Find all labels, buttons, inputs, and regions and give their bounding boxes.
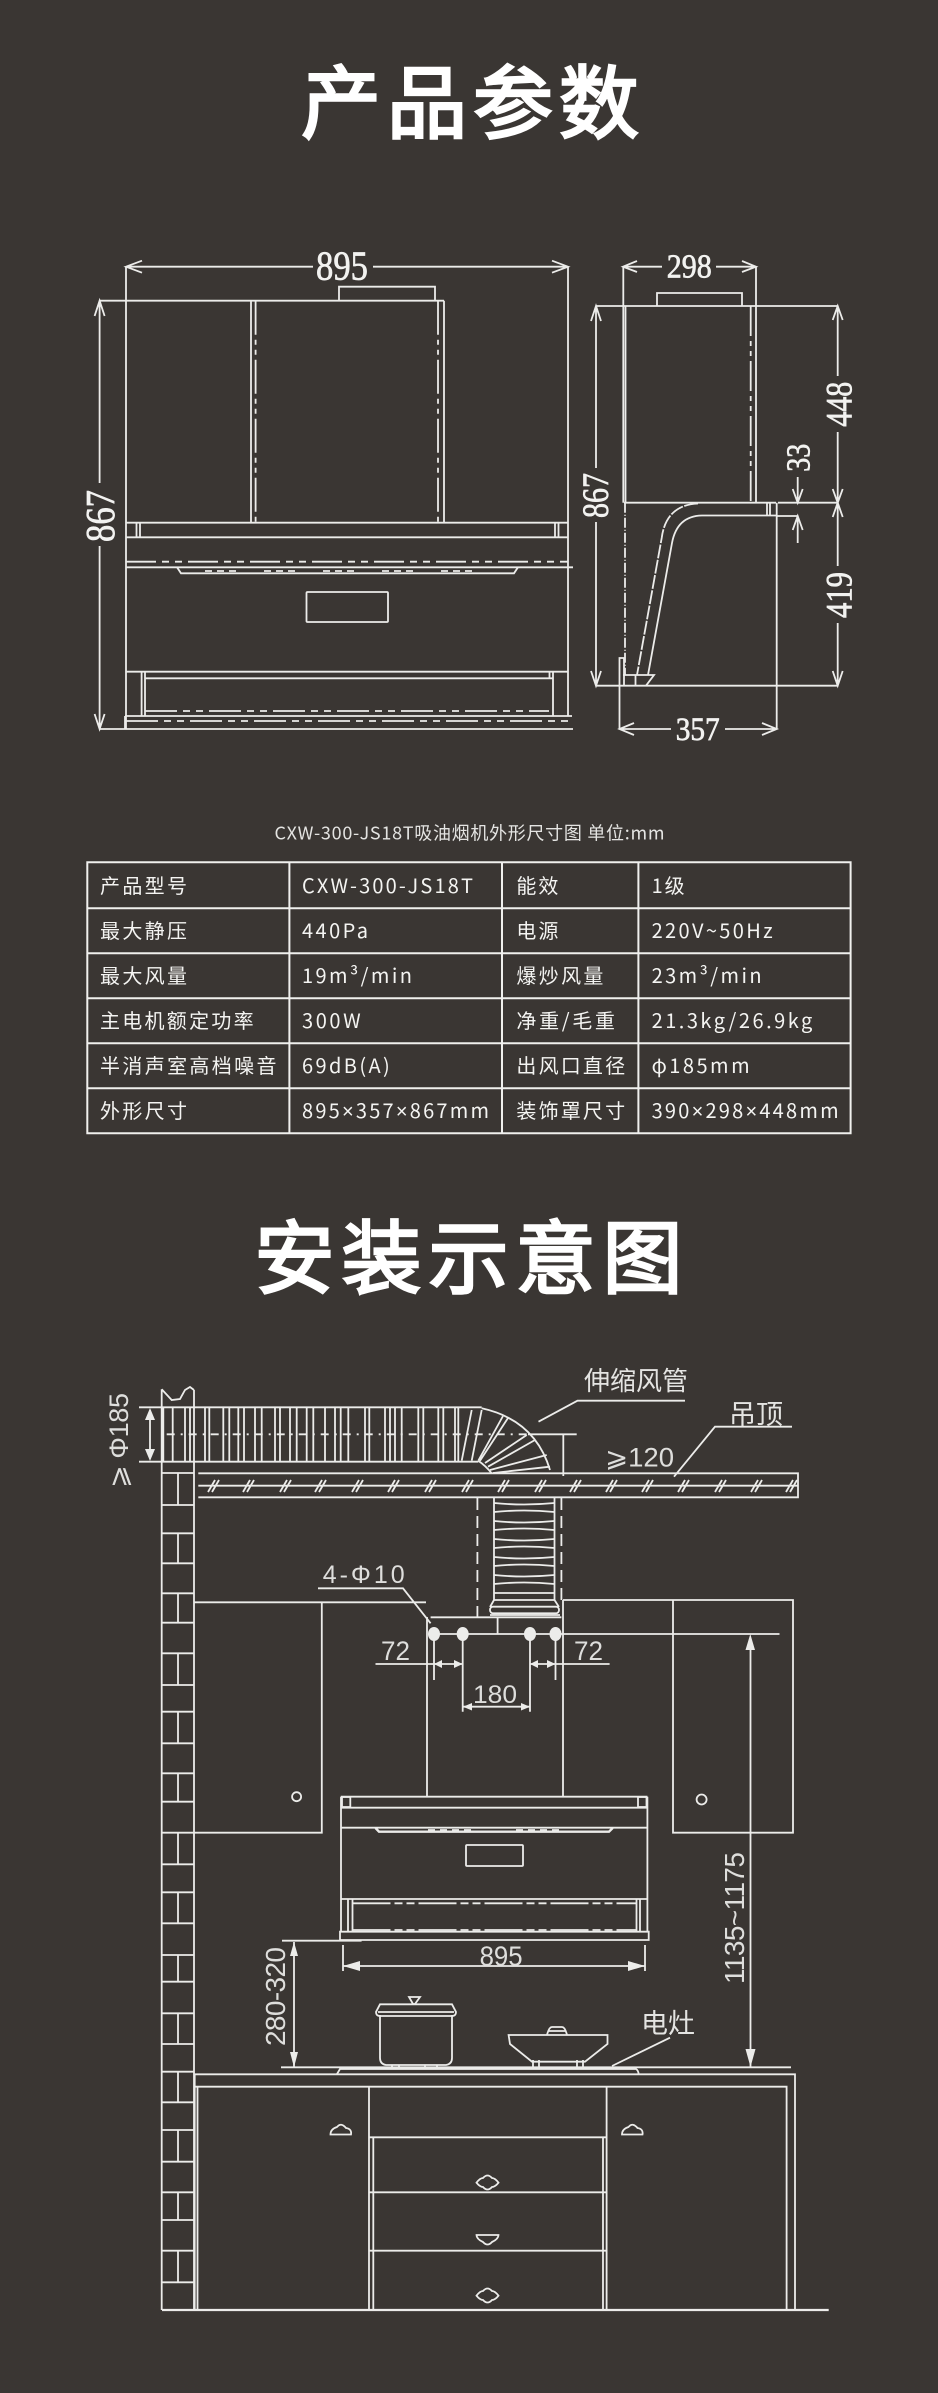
dimension: 448 <box>820 306 861 503</box>
icon: cooking pot <box>376 1997 456 2068</box>
mounting plate and holes <box>427 1600 780 1797</box>
horizontal flexible duct with elbow <box>139 1407 577 1473</box>
table row: air volume: 最大风量 <box>100 960 187 989</box>
label: suspended ceiling: 吊顶 <box>729 1393 783 1432</box>
dimension: 298 <box>623 248 756 286</box>
dimension: width 895 <box>126 242 568 288</box>
dimension: width 895: 895 <box>316 242 368 288</box>
dimension: 1135~1175: 1135~1175 <box>719 1852 750 1984</box>
base cabinets <box>162 2074 829 2310</box>
table row: noise and outlet diameter: 69dB(A) <box>302 1050 390 1079</box>
table row: model and efficiency: 1级 <box>652 870 685 899</box>
label: telescopic duct: 伸缩风管 <box>584 1361 688 1398</box>
dimension: hood height 280-320 <box>260 1941 362 2067</box>
dimension: right 72: 72 <box>574 1636 603 1666</box>
table row: model and efficiency: 产品型号 <box>100 870 187 899</box>
table: product specifications <box>87 862 851 1133</box>
vertical flexible duct <box>477 1498 561 1617</box>
table row: dimensions <box>100 1095 839 1124</box>
dimension: height 867 <box>77 301 123 729</box>
dimension: 180: 180 <box>473 1681 517 1709</box>
table row: air volume <box>100 960 762 989</box>
range hood front <box>340 1797 649 1940</box>
diagram: front view dimensions <box>77 242 573 729</box>
icon: wok <box>509 2027 608 2068</box>
icon: left door handle <box>330 2125 351 2134</box>
table row: air volume: 19m³/min <box>302 960 412 989</box>
table row: noise and outlet diameter: φ185mm <box>652 1050 750 1079</box>
table row: noise and outlet diameter: 半消声室高档噪音 <box>100 1050 276 1079</box>
table row: static pressure and power: 电源 <box>516 915 558 944</box>
dimension: 33 <box>780 444 817 543</box>
label: electric stove <box>612 2002 695 2066</box>
table row: dimensions: 390×298×448mm <box>652 1095 839 1124</box>
table row: motor power and weight: 300W <box>302 1005 361 1034</box>
dimension: side height 867: 867 <box>576 473 617 518</box>
table row: dimensions: 外形尺寸 <box>100 1095 187 1124</box>
table row: static pressure and power <box>100 915 773 944</box>
label: 4-Φ10 holes: 4-Φ10 <box>323 1561 405 1589</box>
dimension: 33: 33 <box>780 444 817 472</box>
dimension: hood height 280-320: 280-320 <box>260 1947 291 2046</box>
dimension: height 867: 867 <box>77 490 123 542</box>
diagram: side view dimensions <box>576 248 861 748</box>
dimension: 448: 448 <box>820 382 861 427</box>
dimension: 298: 298 <box>667 248 712 286</box>
table row: static pressure and power: 220V~50Hz <box>652 915 773 944</box>
table row: motor power and weight: 主电机额定功率 <box>100 1005 254 1034</box>
table row: air volume: 爆炒风量 <box>516 960 603 989</box>
label: 4-Φ10 holes <box>318 1561 431 1623</box>
label: suspended ceiling <box>674 1393 792 1477</box>
table row: dimensions: 装饰罩尺寸 <box>516 1095 625 1124</box>
dimension: duct diameter <box>104 1393 155 1488</box>
caption: diagram title and unit: CXW-300-JS18T吸油烟机外形尺寸图 单位:mm <box>274 820 664 846</box>
brick wall <box>162 1387 194 2310</box>
dimension: 180 <box>463 1681 530 1710</box>
table row: motor power and weight: 净重/毛重 <box>516 1005 615 1034</box>
icon: right door handle <box>622 2125 643 2134</box>
dimension: 357: 357 <box>676 712 720 748</box>
dimension: left 72: 72 <box>381 1636 410 1666</box>
dimension: at least 120: ⩾120 <box>605 1443 674 1473</box>
dimension: side height 867 <box>576 306 617 686</box>
table row: noise and outlet diameter: 出风口直径 <box>516 1050 625 1079</box>
table row: motor power and weight: 21.3kg/26.9kg <box>652 1005 812 1034</box>
icon: drawer handle bottom <box>476 2288 498 2302</box>
countertop line and stove base <box>281 2067 791 2074</box>
table row: static pressure and power: 440Pa <box>302 915 368 944</box>
dimension: 1135~1175 <box>719 1634 756 2067</box>
dimension: duct diameter: ⩾ Φ185 <box>104 1393 134 1488</box>
table row: noise and outlet diameter <box>100 1050 750 1079</box>
left wall cabinet <box>194 1602 426 1833</box>
side view hood body <box>596 267 838 729</box>
table row: model and efficiency: 能效 <box>516 870 558 899</box>
table row: motor power and weight <box>100 1005 812 1034</box>
table row: air volume: 23m³/min <box>652 960 762 989</box>
dimension: left 72 <box>376 1636 463 1668</box>
table row: model and efficiency <box>100 870 685 899</box>
right wall cabinet <box>563 1600 793 1833</box>
dimension: 419 <box>820 503 861 686</box>
table row: static pressure and power: 最大静压 <box>100 915 187 944</box>
label: electric stove: 电灶 <box>641 2002 695 2041</box>
label: telescopic duct <box>538 1361 688 1422</box>
dimension: 357 <box>620 712 777 748</box>
table row: model and efficiency: CXW-300-JS18T <box>302 870 473 899</box>
table row: dimensions: 895×357×867mm <box>302 1095 489 1124</box>
table grid <box>87 862 851 1133</box>
dimension: hood width 895: 895 <box>480 1940 523 1972</box>
dimension: hood width 895 <box>343 1940 645 1972</box>
ceiling slab <box>198 1473 798 1497</box>
dimension: at least 120 <box>563 1434 674 1476</box>
icon: drawer handle top <box>476 2176 498 2190</box>
icon: drawer handle middle <box>476 2235 498 2244</box>
dimension: 419: 419 <box>820 572 861 618</box>
diagram: installation <box>104 1361 829 2310</box>
front view hood body <box>100 267 573 729</box>
title: installation diagram: 安装示意图 <box>254 1195 690 1311</box>
dimension: right 72 <box>530 1636 610 1668</box>
title: product parameters: 产品参数 <box>301 40 645 156</box>
